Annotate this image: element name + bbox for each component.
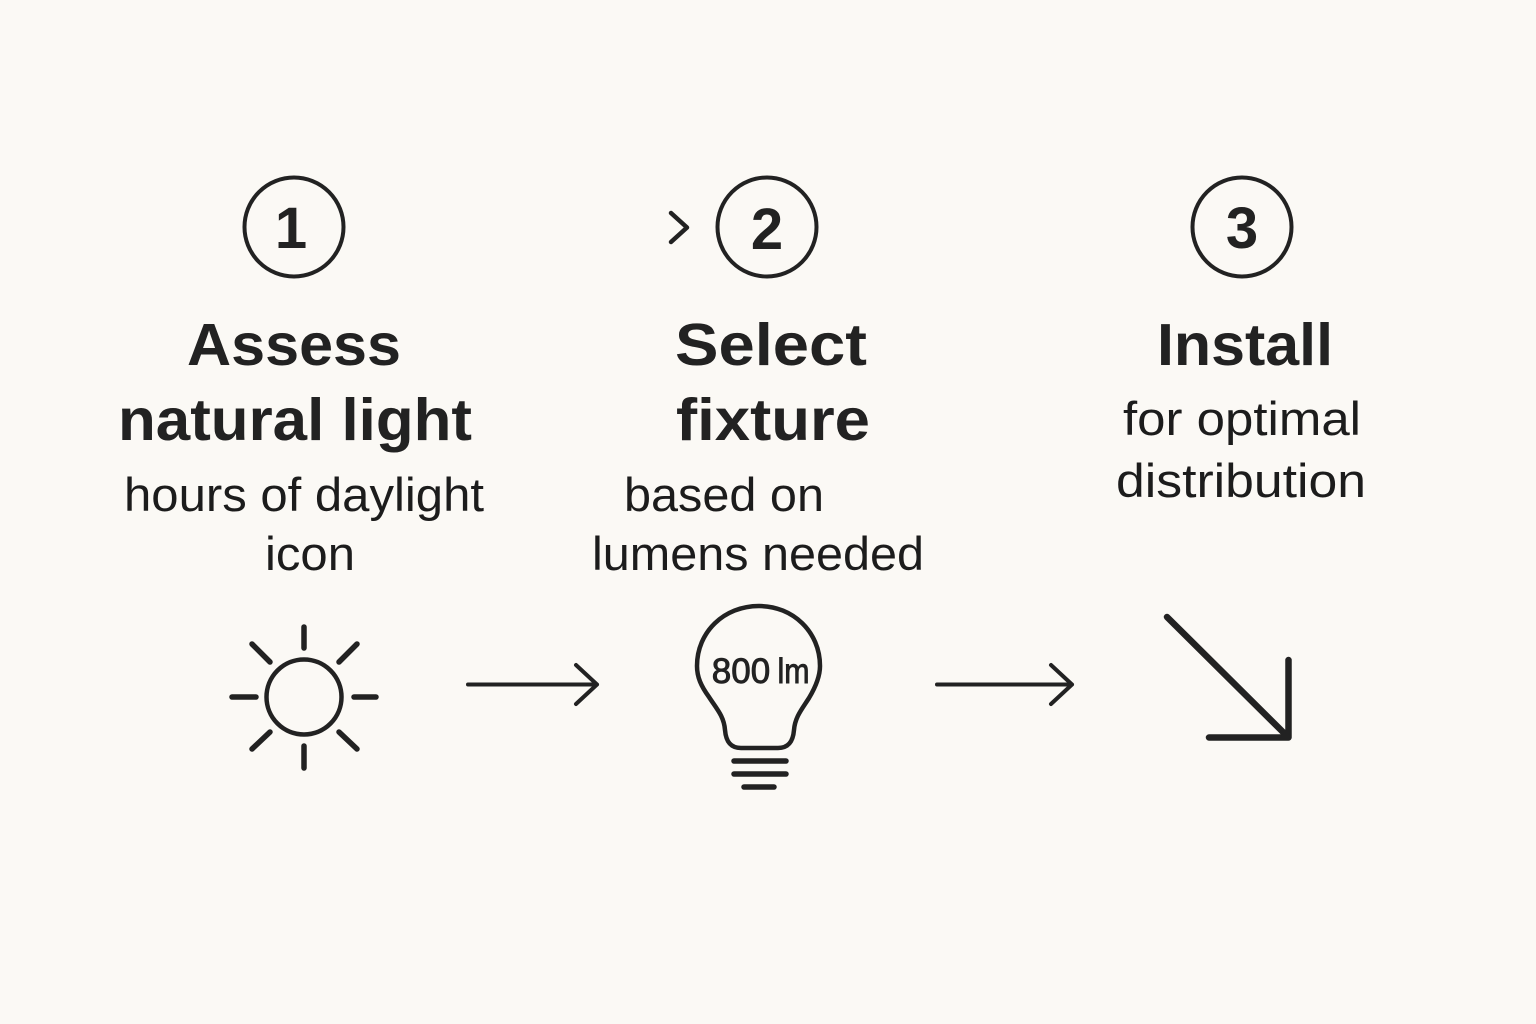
- step 3 heading: Install: [1157, 312, 1333, 378]
- step 3 description: for optimal: [1123, 392, 1361, 445]
- step 2 heading: fixture: [676, 387, 870, 453]
- step 3 description: [1116, 392, 1366, 507]
- step 1 number badge: 1: [275, 196, 307, 261]
- step 2 description: lumens needed: [592, 527, 924, 580]
- step 1 number badge: [244, 178, 344, 276]
- step 1 description: hours of daylight: [124, 468, 484, 521]
- step 1 description: [124, 468, 484, 580]
- arrow: step 2 to step 3: [937, 665, 1072, 704]
- icon: light bulb 800 lm: [697, 606, 820, 787]
- step 1 heading: [118, 312, 472, 453]
- step 2 description: [592, 468, 924, 580]
- icon: light bulb 800 lm: lm: [778, 652, 810, 691]
- icon: sun: [232, 627, 376, 768]
- step 2 heading: [675, 312, 870, 453]
- step 2 number badge: [718, 178, 816, 276]
- icon: light bulb 800 lm: 800: [712, 652, 770, 691]
- icon: diagonal arrow: [1167, 617, 1288, 738]
- step 3 description: distribution: [1116, 454, 1366, 507]
- arrow: step 1 to step 2: [468, 665, 597, 704]
- step 1 heading: natural light: [118, 387, 472, 453]
- step 2 description: based on: [624, 468, 824, 521]
- step 2 number badge: 2: [751, 197, 783, 262]
- step 3 number badge: [1192, 178, 1292, 276]
- step 1 description: icon: [265, 527, 355, 580]
- chevron before step 2: [671, 213, 687, 242]
- step 1 heading: Assess: [187, 312, 401, 378]
- step 2 heading: Select: [675, 312, 867, 378]
- step 3 number badge: 3: [1226, 196, 1258, 261]
